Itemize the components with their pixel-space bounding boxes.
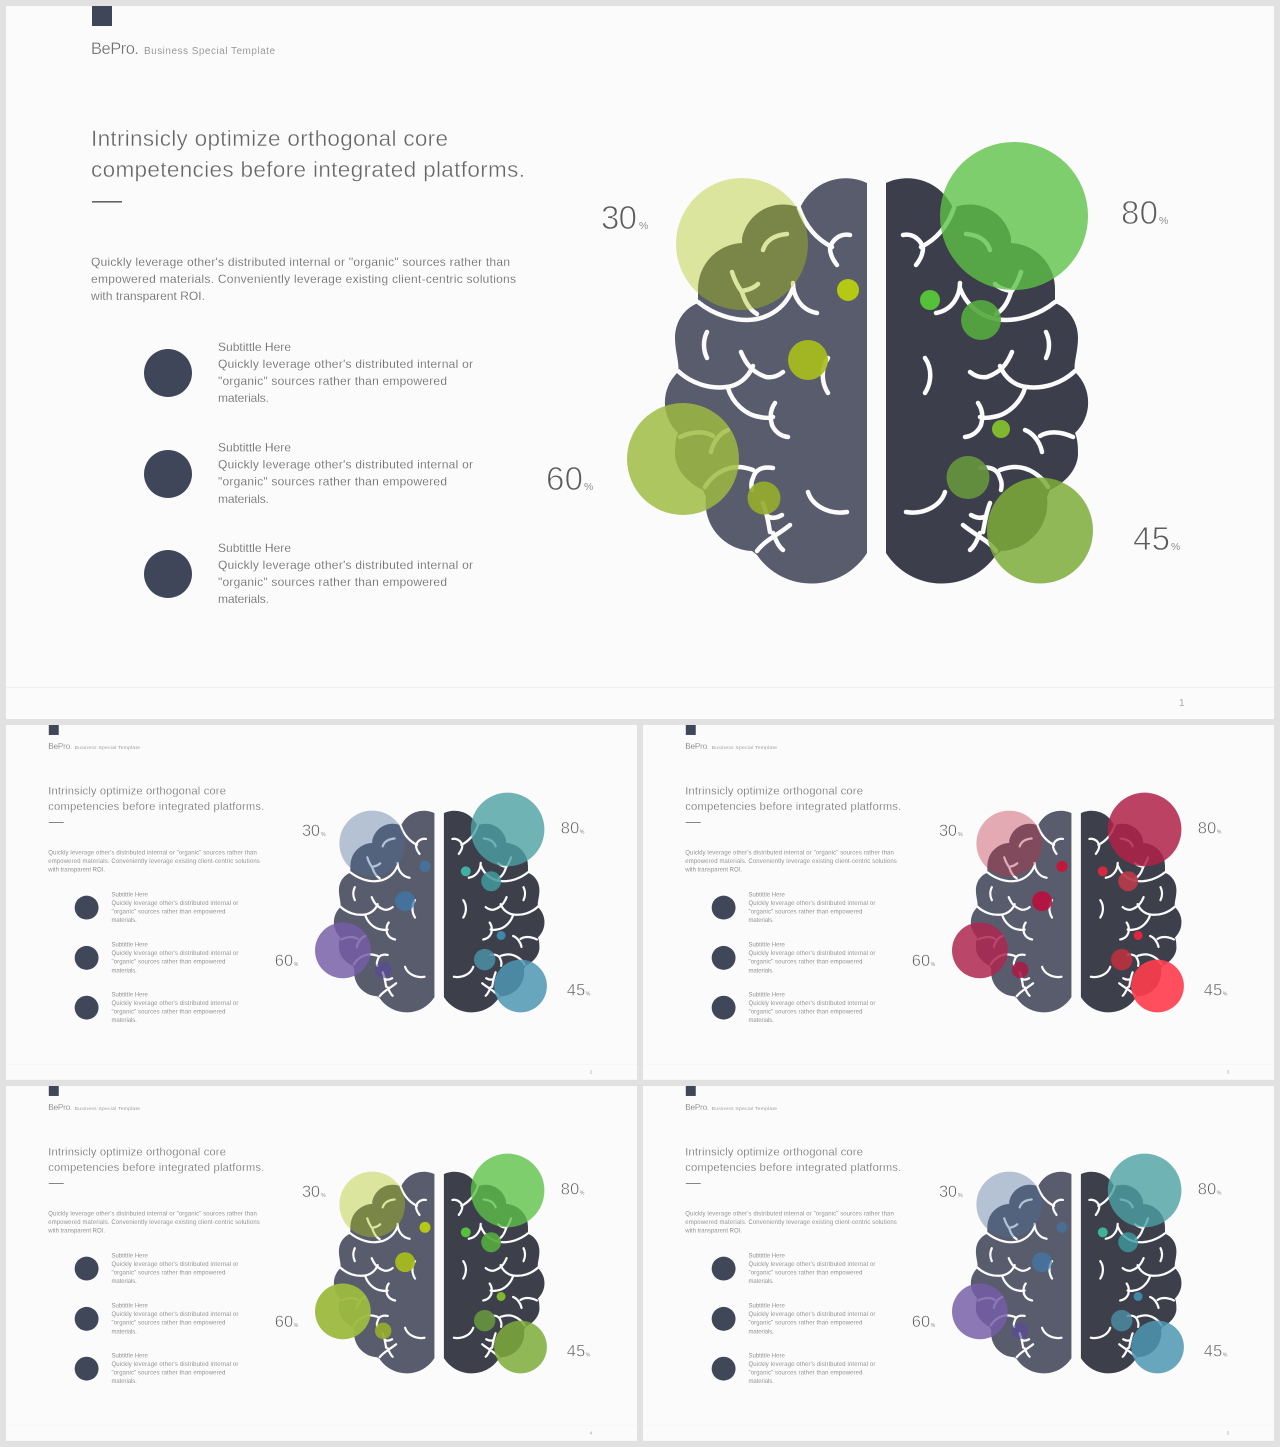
list item 2: Subtittle Here [218, 440, 291, 454]
brand line: Business Special Template [712, 745, 777, 751]
percentage labels: % [586, 992, 591, 998]
intro paragraph [684, 1211, 897, 1234]
list item 2: Subtittle Here [111, 943, 148, 949]
list item 2: materials. [748, 968, 774, 974]
panel: main slide green [6, 6, 1274, 719]
logo square [49, 725, 59, 735]
list item 2: materials. [111, 1329, 137, 1335]
percentage labels: % [639, 220, 648, 232]
list item 1: Subtittle Here [111, 893, 148, 899]
list item 3: Quickly leverage other's distributed internal or [111, 1001, 238, 1007]
percentage labels: 30 [601, 199, 637, 236]
list item 2: Subtittle Here [748, 1304, 785, 1310]
list item 1: materials. [748, 918, 774, 924]
list item 1 [712, 893, 875, 924]
logo square [49, 1086, 59, 1096]
percentage labels: % [1223, 1353, 1228, 1359]
percentage labels: % [1171, 541, 1180, 553]
heading: Intrinsicly optimize orthogonal core [91, 126, 448, 151]
heading [685, 1147, 901, 1174]
heading: Intrinsicly optimize orthogonal core [48, 786, 226, 798]
brand line: BePro. [48, 1103, 72, 1112]
list item 1: Subtittle Here [111, 1254, 148, 1260]
list item 3: Quickly leverage other's distributed internal or [218, 558, 473, 572]
list item 2 [75, 1304, 238, 1335]
intro paragraph: empowered materials. Conveniently leverage existing client-centric solutions [685, 1220, 897, 1226]
logo square [686, 725, 696, 735]
panel: small slide green [6, 1086, 637, 1441]
list item 3: "organic" sources rather than empowered [111, 1371, 225, 1377]
percentage labels: % [958, 1193, 963, 1199]
logo square [92, 6, 112, 26]
percentage labels: 80 [1121, 194, 1158, 231]
list item 2: Subtittle Here [748, 943, 785, 949]
brand line [91, 40, 275, 58]
heading: Intrinsicly optimize orthogonal core [685, 786, 863, 798]
list item 2: Quickly leverage other's distributed internal or [748, 1312, 875, 1318]
percentage labels: 60 [546, 460, 583, 497]
intro paragraph: empowered materials. Conveniently leverage existing client-centric solutions [91, 272, 516, 286]
intro paragraph: Quickly leverage other's distributed internal or "organic" sources rather than [48, 1211, 257, 1217]
percentage labels: % [294, 1323, 299, 1329]
intro paragraph: with transparent ROI. [47, 1228, 105, 1234]
percentage labels: 45 [1204, 1343, 1222, 1361]
percentage labels: % [1223, 992, 1228, 998]
page number: 2 [590, 1069, 593, 1075]
list item 3: Subtittle Here [111, 993, 148, 999]
list item 2: "organic" sources rather than empowered [111, 1321, 225, 1327]
list item 2: Quickly leverage other's distributed internal or [111, 1312, 238, 1318]
intro paragraph: empowered materials. Conveniently leverage existing client-centric solutions [685, 859, 897, 865]
brand line: BePro. [48, 742, 72, 751]
bubbles: green [627, 142, 1093, 584]
panel: small slide red [643, 725, 1274, 1080]
list item 3 [75, 1354, 238, 1385]
percentage labels: % [580, 1190, 585, 1196]
list item 1: materials. [111, 918, 137, 924]
percentage labels: % [321, 1193, 326, 1199]
brand line [685, 1103, 777, 1112]
page number: 4 [590, 1430, 593, 1436]
list item 3: "organic" sources rather than empowered [748, 1371, 862, 1377]
brand line [685, 742, 777, 751]
intro paragraph: with transparent ROI. [684, 1228, 742, 1234]
list item 2: "organic" sources rather than empowered [111, 960, 225, 966]
percentage labels: 80 [561, 819, 579, 837]
heading [91, 126, 525, 182]
percentage labels: 60 [275, 1313, 293, 1331]
percentage labels: % [584, 481, 593, 493]
heading [48, 1147, 264, 1174]
list item 2: Subtittle Here [111, 1304, 148, 1310]
percentage labels: 30 [939, 1183, 957, 1201]
list item 1 [75, 893, 238, 924]
panel: small slide blue-teal repeat [643, 1086, 1274, 1441]
heading: competencies before integrated platforms. [48, 1162, 264, 1174]
list item 1: Subtittle Here [218, 340, 291, 354]
list item 3: materials. [218, 592, 269, 606]
percentage labels: 30 [302, 822, 320, 840]
list item 3: Subtittle Here [218, 541, 291, 555]
brain illustration [334, 1172, 544, 1373]
percentage labels: 45 [567, 982, 585, 1000]
list item 1: materials. [748, 1279, 774, 1285]
list item 2 [144, 440, 473, 506]
list item 3: "organic" sources rather than empowered [748, 1010, 862, 1016]
list item 1 [712, 1254, 875, 1285]
percentage labels: 45 [567, 1343, 585, 1361]
intro paragraph [684, 850, 897, 873]
intro paragraph: empowered materials. Conveniently leverage existing client-centric solutions [48, 1220, 260, 1226]
intro paragraph: Quickly leverage other's distributed internal or "organic" sources rather than [48, 850, 257, 856]
heading: competencies before integrated platforms. [91, 157, 525, 182]
brain illustration [971, 1172, 1181, 1373]
page number: 5 [1227, 1430, 1230, 1436]
brain illustration [665, 178, 1088, 584]
brand line [48, 742, 140, 751]
intro paragraph: with transparent ROI. [90, 289, 205, 303]
list item 1: Quickly leverage other's distributed internal or [111, 1262, 238, 1268]
percentage labels: 30 [939, 822, 957, 840]
percentage labels [546, 194, 1180, 557]
list item 1: Subtittle Here [748, 893, 785, 899]
percentage labels: % [958, 832, 963, 838]
list item 3: "organic" sources rather than empowered [218, 575, 447, 589]
list item 3: Subtittle Here [111, 1354, 148, 1360]
heading: competencies before integrated platforms. [685, 1162, 901, 1174]
intro paragraph: with transparent ROI. [684, 867, 742, 873]
list item 2 [712, 943, 875, 974]
list item 1: "organic" sources rather than empowered [748, 910, 862, 916]
percentage labels: % [1159, 215, 1168, 227]
list item 3: materials. [748, 1379, 774, 1385]
percentage labels: % [1217, 1190, 1222, 1196]
list item 3 [712, 1354, 875, 1385]
bubbles: red [952, 793, 1184, 1012]
percentage labels: 60 [275, 952, 293, 970]
percentage labels: 80 [1198, 819, 1216, 837]
list item 1: Quickly leverage other's distributed internal or [748, 1262, 875, 1268]
list item 1: materials. [111, 1279, 137, 1285]
percentage labels: 45 [1204, 982, 1222, 1000]
bubbles: blue-teal [315, 793, 547, 1012]
list item 3: Quickly leverage other's distributed internal or [111, 1362, 238, 1368]
heading [48, 786, 264, 813]
list item 1: "organic" sources rather than empowered [111, 1271, 225, 1277]
percentage labels [275, 819, 591, 1000]
list item 2 [75, 943, 238, 974]
heading: competencies before integrated platforms. [48, 801, 264, 813]
heading: Intrinsicly optimize orthogonal core [685, 1147, 863, 1159]
page number: 1 [1179, 698, 1185, 709]
list item 1: Quickly leverage other's distributed internal or [218, 357, 473, 371]
list item 1 [75, 1254, 238, 1285]
intro paragraph [47, 1211, 260, 1234]
percentage labels: % [931, 1323, 936, 1329]
percentage labels: % [931, 962, 936, 968]
list item 1: "organic" sources rather than empowered [111, 910, 225, 916]
list item 3 [144, 541, 473, 606]
brand line: Business Special Template [75, 745, 140, 751]
percentage labels [912, 819, 1228, 1000]
list item 2: "organic" sources rather than empowered [748, 1321, 862, 1327]
list item 2: Quickly leverage other's distributed internal or [111, 951, 238, 957]
bubbles: blue-teal [952, 1154, 1184, 1373]
intro paragraph [90, 255, 516, 303]
brain illustration [334, 811, 544, 1012]
brand line [48, 1103, 140, 1112]
list item 3 [75, 993, 238, 1024]
percentage labels: 60 [912, 1313, 930, 1331]
list item 2: materials. [748, 1329, 774, 1335]
logo square [686, 1086, 696, 1096]
percentage labels: % [580, 829, 585, 835]
list item 3: Quickly leverage other's distributed internal or [748, 1362, 875, 1368]
list item 1: "organic" sources rather than empowered [748, 1271, 862, 1277]
list item 2: materials. [218, 492, 269, 506]
list item 3 [712, 993, 875, 1024]
list item 3: Subtittle Here [748, 1354, 785, 1360]
list item 3: materials. [111, 1018, 137, 1024]
list item 3: materials. [748, 1018, 774, 1024]
intro paragraph: Quickly leverage other's distributed internal or "organic" sources rather than [685, 850, 894, 856]
percentage labels: % [321, 832, 326, 838]
percentage labels: 80 [561, 1180, 579, 1198]
percentage labels: % [1217, 829, 1222, 835]
list item 3: Subtittle Here [748, 993, 785, 999]
intro paragraph: empowered materials. Conveniently leverage existing client-centric solutions [48, 859, 260, 865]
bubbles: green [315, 1154, 547, 1373]
list item 2: "organic" sources rather than empowered [748, 960, 862, 966]
list item 1: Subtittle Here [748, 1254, 785, 1260]
list item 2: materials. [111, 968, 137, 974]
list item 1: "organic" sources rather than empowered [218, 374, 447, 388]
percentage labels: 80 [1198, 1180, 1216, 1198]
list item 2: Quickly leverage other's distributed internal or [218, 458, 473, 472]
brand line: Business Special Template [712, 1106, 777, 1112]
panel: small slide blue-teal [6, 725, 637, 1080]
list item 1 [144, 340, 473, 405]
percentage labels [275, 1180, 591, 1361]
brand line: BePro. [91, 40, 139, 58]
heading: Intrinsicly optimize orthogonal core [48, 1147, 226, 1159]
intro paragraph: with transparent ROI. [47, 867, 105, 873]
percentage labels: 45 [1133, 520, 1170, 557]
intro paragraph: Quickly leverage other's distributed internal or "organic" sources rather than [91, 255, 510, 269]
brain illustration [971, 811, 1181, 1012]
list item 2: Quickly leverage other's distributed internal or [748, 951, 875, 957]
list item 1: Quickly leverage other's distributed internal or [748, 901, 875, 907]
intro paragraph: Quickly leverage other's distributed internal or "organic" sources rather than [685, 1211, 894, 1217]
brand line: Business Special Template [75, 1106, 140, 1112]
percentage labels [912, 1180, 1228, 1361]
percentage labels: 30 [302, 1183, 320, 1201]
percentage labels: % [294, 962, 299, 968]
heading: competencies before integrated platforms. [685, 801, 901, 813]
list item 3: materials. [111, 1379, 137, 1385]
brand line: BePro. [685, 1103, 709, 1112]
list item 3: "organic" sources rather than empowered [111, 1010, 225, 1016]
intro paragraph [47, 850, 260, 873]
list item 2: "organic" sources rather than empowered [218, 474, 447, 488]
list item 1: materials. [218, 391, 269, 405]
list item 3: Quickly leverage other's distributed internal or [748, 1001, 875, 1007]
brand line: BePro. [685, 742, 709, 751]
heading [685, 786, 901, 813]
brand line: Business Special Template [144, 46, 275, 57]
list item 1: Quickly leverage other's distributed internal or [111, 901, 238, 907]
percentage labels: 60 [912, 952, 930, 970]
page number: 3 [1227, 1069, 1230, 1075]
list item 2 [712, 1304, 875, 1335]
percentage labels: % [586, 1353, 591, 1359]
